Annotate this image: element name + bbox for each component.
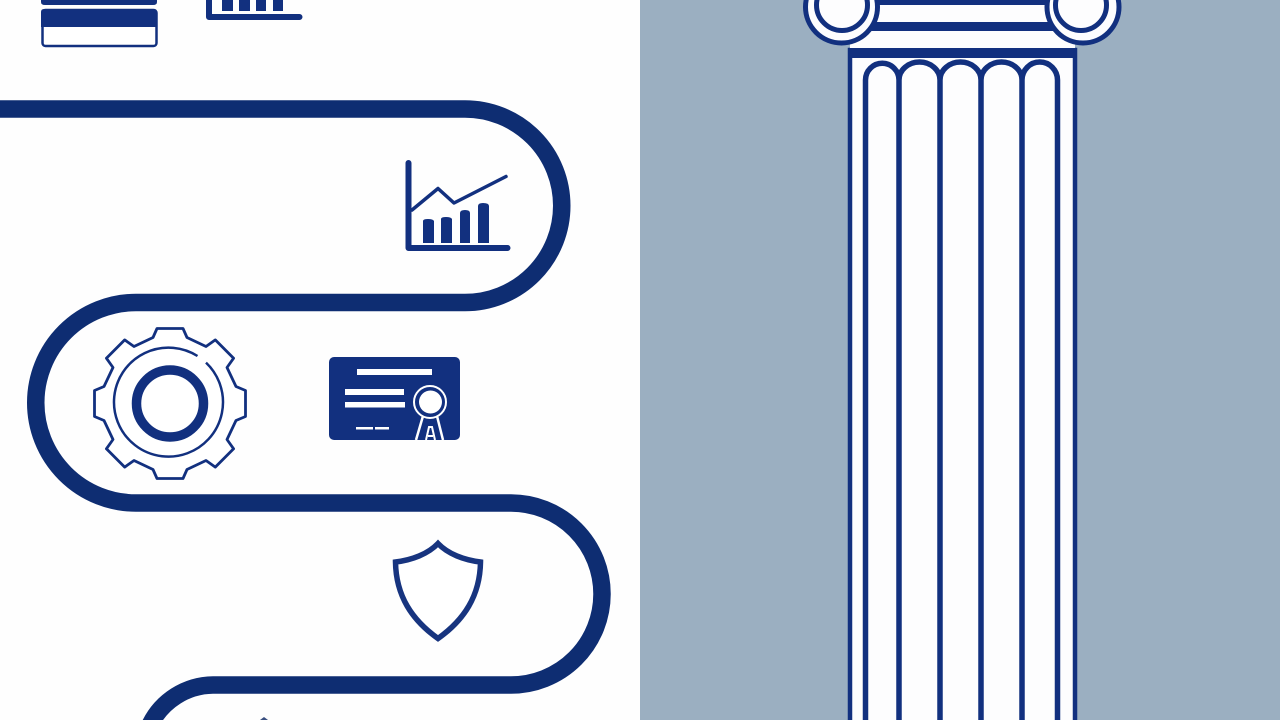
icon: cropped marker tip [260, 717, 268, 720]
pillar capital [806, 0, 1119, 48]
icon: bar chart cropped [209, 0, 300, 17]
icon: credit card stack [41, 0, 157, 46]
winding path [0, 109, 602, 720]
left volute [806, 0, 878, 43]
icon: shield [396, 544, 480, 638]
pillar shaft [848, 48, 1077, 720]
panel: pillar side [640, 0, 1280, 720]
right volute [1047, 0, 1119, 43]
icon: gear [94, 328, 246, 478]
column flutes [866, 62, 1058, 720]
panel: pathway side [0, 0, 640, 720]
icon: certificate [329, 357, 460, 440]
icon: growth chart [408, 163, 508, 248]
